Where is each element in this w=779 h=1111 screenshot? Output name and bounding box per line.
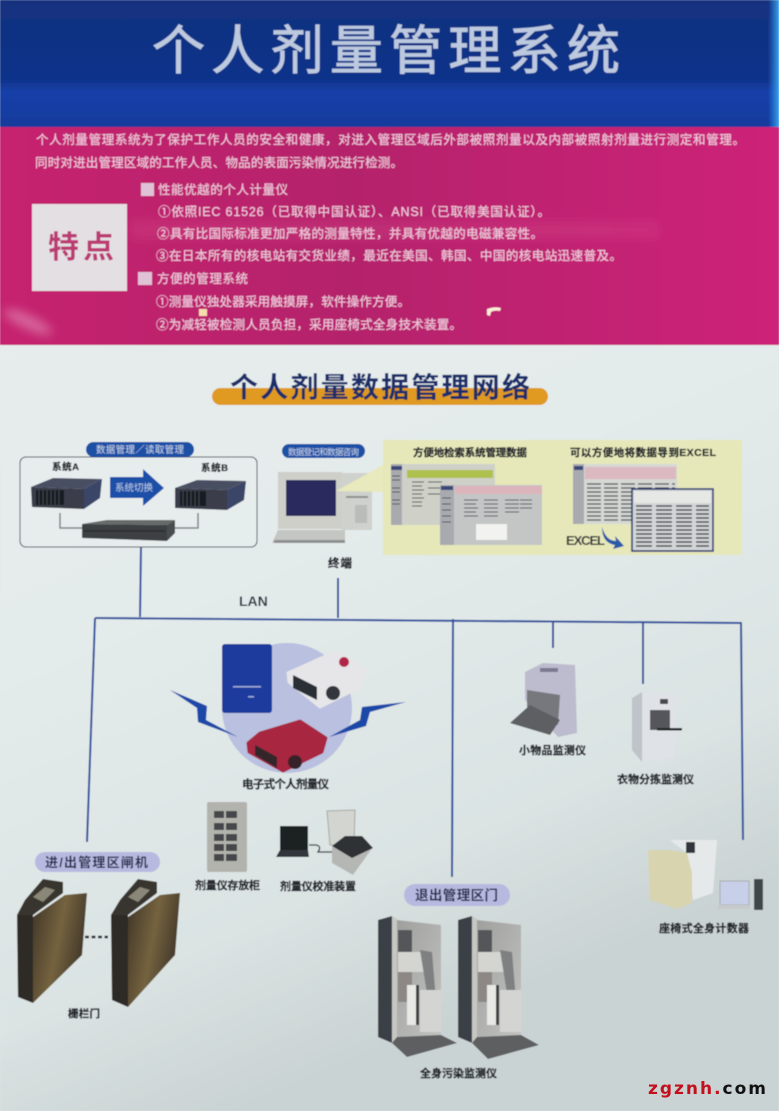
blue dosimeter: [222, 644, 272, 713]
portal monitor 1: [378, 916, 457, 1057]
switch arrow: [110, 469, 164, 506]
LAN network lines: [87, 547, 743, 877]
portal monitor 2: [458, 916, 539, 1059]
intro text: 同时对进出管理区域的工作人员、物品的表面污染情况进行检测。: [35, 155, 403, 170]
LAN label: LAN: [239, 593, 268, 609]
feature list: dosimeter: [141, 182, 622, 263]
feature badge: [32, 204, 127, 291]
panel: seated whole body counter: 座椅式全身计数器: [659, 921, 749, 935]
server A: [31, 461, 102, 509]
panel: small article monitor: [510, 663, 586, 757]
search screen 1: [391, 464, 495, 525]
panel: magenta description and features: [0, 127, 779, 345]
panel: dosimeter storage cabinet: [195, 802, 260, 892]
feature list: dosimeter: ③在日本所有的核电站有交货业绩，最近在美国、韩国、中国的核电站迅速普及。: [156, 248, 622, 263]
terminal label: 终端: [328, 556, 352, 570]
red dosimeter: [248, 721, 326, 771]
panel: terminal: [272, 444, 372, 570]
feature list: management system: [138, 271, 462, 332]
gate pill: 进/出管理区闸机: [45, 855, 148, 870]
server A: 系统A: [52, 461, 79, 473]
pill label: 数据管理／读取管理: [96, 444, 184, 456]
panel: entry and exit gates: [17, 852, 180, 1020]
computer icon: [272, 472, 372, 543]
excel window: [632, 489, 713, 551]
intro text: 个人剂量管理系统为了保护工作人员的安全和健康，对进入管理区域后外部被照剂量以及内部被照射剂量进行测定和管理。: [36, 132, 745, 147]
header banner: [0, 0, 779, 127]
pill label: 数据登记和数据咨询: [288, 447, 359, 457]
right lightning: [329, 702, 406, 737]
backdrop circle: [222, 643, 352, 773]
gate 1: [17, 879, 87, 1003]
panel: exit monitors: [378, 884, 539, 1080]
panel: seated whole body counter: [648, 840, 763, 935]
feature list: dosimeter: ①依照IEC 61526（已取得中国认证）、ANSI（已取得美国认证）。: [158, 204, 550, 219]
feature list: management system: ②为减轻被检测人员负担，采用座椅式全身技术装置。: [156, 317, 462, 332]
gate 2: [111, 879, 180, 1007]
panel: data management servers: [20, 442, 257, 547]
feature list: dosimeter: ②具有比国际标准更加严格的测量特性，并具有优越的电磁兼容性。: [157, 226, 543, 241]
panel: software screens callout: [336, 440, 742, 555]
intro text: [35, 132, 745, 170]
section heading: 个人剂量数据管理网络: [230, 372, 530, 403]
feature list: management system: 方便的管理系统: [157, 271, 248, 286]
connector dots: [85, 936, 108, 938]
dosimeter label: 电子式个人剂量仪: [242, 777, 330, 791]
heading: export: 可以方便地将数据导到EXCEL: [570, 446, 717, 459]
heading: search: 方便地检索系统管理数据: [413, 446, 528, 459]
panel: garment sorting monitor: 衣物分拣监测仪: [617, 772, 694, 786]
export screen: [573, 464, 677, 524]
server B: [175, 462, 246, 510]
panel: dosimeter storage cabinet: 剂量仪存放柜: [195, 878, 260, 892]
pill label: [86, 442, 194, 457]
excel arrow: [602, 527, 624, 549]
exit pill: 退出管理区门: [415, 887, 498, 903]
white dosimeter: [288, 651, 366, 707]
exit pill: [404, 884, 510, 906]
excel label: EXCEL: [566, 533, 605, 548]
panel: dosimeter calibration device: 剂量仪校准装置: [280, 879, 356, 893]
gate label: 栅栏门: [68, 1007, 100, 1020]
main title: 个人剂量管理系统: [152, 22, 620, 81]
switch arrow: 系统切换: [115, 482, 153, 494]
server B: 系统B: [201, 462, 228, 474]
left lightning: [170, 690, 238, 737]
feature badge: 特点: [48, 230, 114, 265]
panel: dosimeter calibration device: [276, 810, 373, 893]
panel: electronic personal dosimeters: [170, 643, 406, 791]
feature list: management system: ①测量仪独处器采用触摸屏，软件操作方便。: [156, 294, 410, 309]
watermark: zgznh.com: [648, 1079, 766, 1099]
feature list: dosimeter: 性能优越的个人计量仪: [158, 182, 288, 197]
panel: small article monitor: 小物品监测仪: [519, 743, 586, 757]
search screen 2: [440, 485, 542, 545]
gate pill: [35, 852, 160, 872]
portal label: 全身污染监测仪: [420, 1066, 497, 1080]
panel: garment sorting monitor: [617, 692, 694, 786]
shared storage: [60, 513, 198, 541]
